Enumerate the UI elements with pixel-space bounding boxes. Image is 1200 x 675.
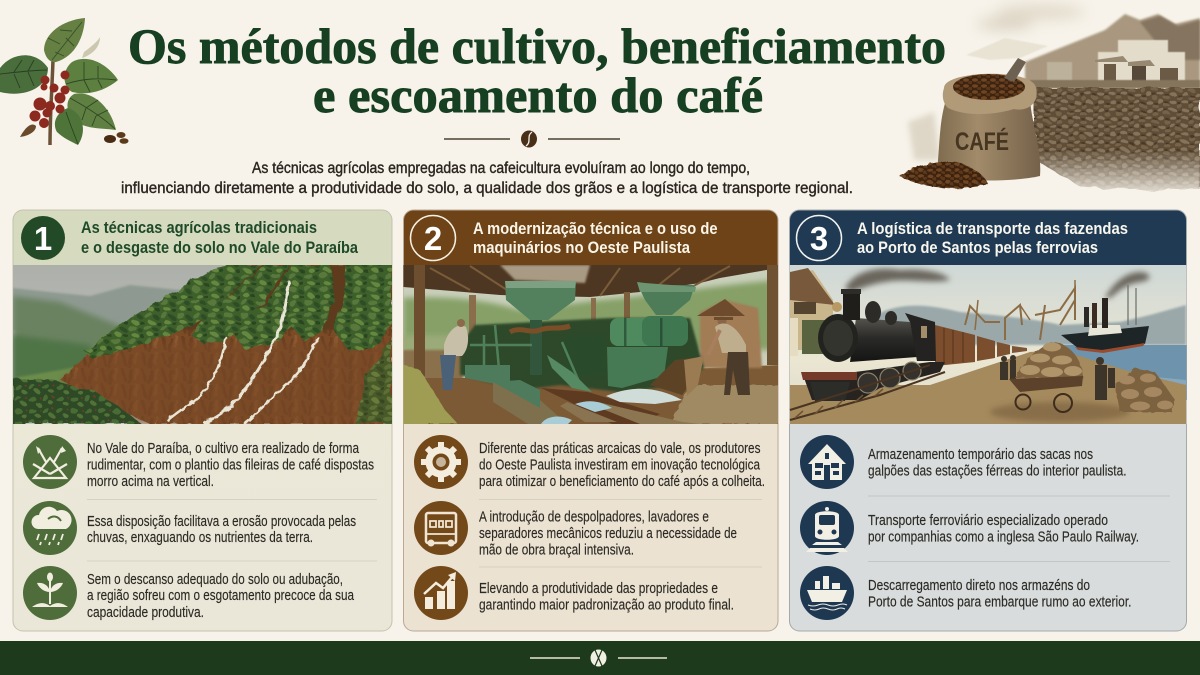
sepia illustration: farm and coffee sack (899, 4, 1200, 200)
panel 1 item: vertical planting (23, 435, 374, 490)
dock workers (1000, 355, 1115, 400)
worker, right (708, 316, 750, 395)
panel 1 item: erosion: chuvas, enxaguando os nutrientes da terra. (87, 529, 313, 546)
panel 1 heading (81, 218, 358, 257)
icon: growth chart (414, 566, 468, 620)
footer band (0, 641, 1200, 675)
panel 3 item: warehouses (800, 435, 1126, 489)
panel 2 item: productivity (414, 566, 734, 620)
footer ornament: coffee bean (590, 650, 606, 666)
panel 3: rail logistics (790, 210, 1190, 631)
panel 3 heading: ao Porto de Santos pelas ferrovias (857, 238, 1098, 257)
icon: ship (800, 566, 854, 620)
panel 1 heading: As técnicas agrícolas tradicionais (81, 218, 317, 237)
panel 3 heading: A logística de transporte das fazendas (857, 219, 1128, 238)
icon: hillside rows (23, 435, 77, 489)
panel 2: technical modernization (403, 210, 780, 631)
cart with coffee sacks (1009, 342, 1083, 412)
panel 2 item: machines (414, 501, 737, 558)
panel 3 illustration: steam train and port (790, 265, 1190, 424)
panel 2 heading (473, 219, 718, 257)
panel 1 item: vertical planting: No Vale do Paraíba, o cultivo era realizado de forma (87, 440, 360, 457)
icon: warehouse (800, 435, 854, 489)
panel 3 item: port of Santos (800, 566, 1132, 620)
panel 3 item: railway: Transporte ferroviário especializado operado (868, 512, 1108, 529)
panel 3 item: warehouses: galpões das estações férreas do interior paulista. (868, 462, 1126, 480)
icon: train (800, 501, 854, 555)
panel 2 number badge (410, 216, 456, 260)
subtitle (121, 160, 853, 197)
panel 1 item: soil exhaustion: capacidade produtiva. (87, 604, 204, 621)
panel 1 number badge (21, 216, 65, 260)
title: Os métodos de cultivo, beneficiamento (128, 18, 946, 74)
title (128, 18, 946, 123)
botanical illustration: coffee branch (0, 18, 128, 145)
panel 1 item: erosion: Essa disposição facilitava a erosão provocada pelas (87, 513, 356, 530)
panel 3 number badge (796, 216, 842, 260)
panel 2 item: productivity: Elevando a produtividade das propriedades e (479, 580, 718, 597)
pile of coffee sacks (1115, 368, 1175, 412)
panel 2 item: machines: A introdução de despolpadores, lavadores e (479, 509, 709, 526)
panel 1 item: soil exhaustion: a região sofreu com o esgotamento precoce da sua (87, 587, 355, 604)
panel 2 item: machines: separadores mecânicos reduziu a necessidade de (479, 525, 737, 542)
panel 2 illustration: coffee processing machinery (403, 265, 780, 424)
panel 1: traditional techniques (13, 210, 392, 631)
panel 3 item: warehouses: Armazenamento temporário das sacas nos (868, 446, 1093, 463)
panel 1 heading: e o desgaste do solo no Vale do Paraíba (81, 238, 358, 257)
title: e escoamento do café (313, 67, 763, 123)
panel 2 heading: A modernização técnica e o uso de (473, 219, 718, 238)
panel 1 item: soil exhaustion: Sem o descanso adequado do solo ou adubação, (87, 571, 343, 588)
steam locomotive (801, 289, 945, 401)
panel 1 item: erosion (23, 501, 356, 555)
panel 2 item: innovation: Diferente das práticas arcaicas do vale, os produtores (479, 440, 760, 457)
subtitle: As técnicas agrícolas empregadas na cafeicultura evoluíram ao longo do tempo, (252, 160, 750, 177)
railway tracks (790, 365, 945, 420)
panel 2 item: machines: mão de obra braçal intensiva. (479, 542, 634, 558)
panel 3 item: railway (800, 501, 1139, 555)
worker, left (440, 319, 468, 390)
panel 1 item: soil exhaustion (23, 566, 355, 621)
panel 1 item: vertical planting: rudimentar, com o plantio das fileiras de café dispostas (87, 456, 374, 474)
title ornament: coffee bean divider (444, 130, 620, 148)
label: CAFÉ on the sack: CAFÉ (955, 127, 1009, 156)
icon: rain cloud (23, 501, 77, 555)
panel 3 heading (857, 219, 1128, 257)
panel 3 item: port of Santos: Porto de Santos para embarque rumo ao exterior. (868, 594, 1132, 610)
panel 1 item: vertical planting: morro acima na vertical. (87, 473, 214, 490)
panel 1 illustration: eroded hillside in the rain (13, 265, 392, 424)
panel 3 item: port of Santos: Descarregamento direto nos armazéns do (868, 577, 1090, 594)
panel 2 item: innovation (414, 435, 765, 490)
icon: processing machine (414, 501, 468, 555)
panel 2 item: innovation: do Oeste Paulista investiram em inovação tecnológica (479, 456, 761, 474)
icon: gear (414, 435, 468, 489)
panel 2 heading: maquinários no Oeste Paulista (473, 238, 690, 257)
panel 1 number badge: 1 (34, 220, 52, 257)
panel 3 number badge: 3 (810, 220, 828, 257)
subtitle: influenciando diretamente a produtividade do solo, a qualidade dos grãos e a logística de transporte regional. (121, 180, 853, 197)
freight wagons (935, 325, 1027, 366)
cargo ship (1061, 285, 1149, 353)
icon: sprout on book (23, 566, 77, 620)
panel 2 item: innovation: para otimizar o beneficiamento do café após a colheita. (479, 473, 765, 490)
panel 2 number badge: 2 (424, 220, 442, 257)
panel 2 item: productivity: garantindo maior padronização ao produto final. (479, 596, 734, 614)
